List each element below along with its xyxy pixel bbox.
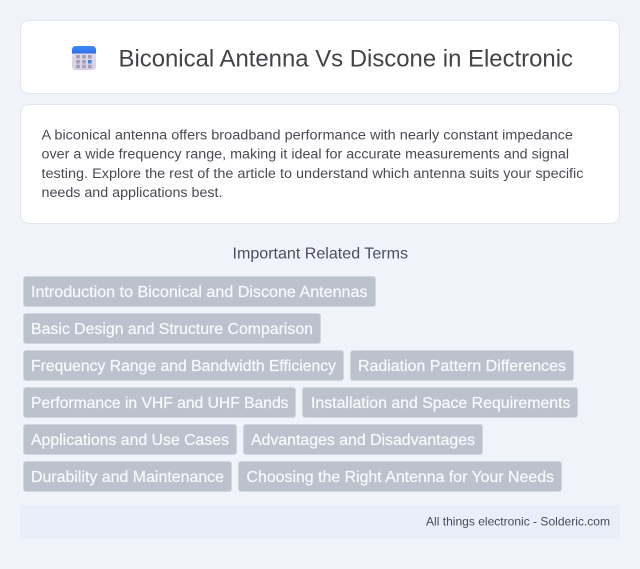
tag: frequency range: Frequency Range and Bandwidth Efficiency [31,358,336,375]
tag: advantages: Advantages and Disadvantages [251,432,475,449]
tag: VHF and UHF performance: Performance in VHF and UHF Bands [31,395,288,412]
tag: applications [24,424,236,454]
tag: advantages [244,424,482,454]
tag: frequency range [24,350,344,380]
tag: basic design [24,314,320,344]
tag: introduction [24,276,376,306]
tag: introduction: Introduction to Biconical and Discone Antennas [31,284,368,301]
heading: related terms: Important Related Terms [232,246,408,262]
tag: installation: Installation and Space Requirements [311,395,570,412]
tag: applications: Applications and Use Cases [31,432,229,449]
tag: durability [24,462,232,492]
tag: durability: Durability and Maintenance [31,469,224,486]
icon: calendar [72,46,96,70]
tag: choosing antenna: Choosing the Right Antenna for Your Needs [246,469,554,486]
intro paragraph: needs and applications best. [42,185,222,201]
tag: basic design: Basic Design and Structure Comparison [31,321,313,338]
tag: choosing antenna [238,462,562,492]
footer credit: All things electronic - Solderic.com [426,515,610,529]
intro paragraph: over a wide frequency range, making it ideal for accurate measurements and signal [42,147,569,163]
tag: installation [302,388,578,418]
panel: intro text [20,104,620,224]
tag: radiation pattern [350,350,574,380]
intro paragraph: testing. Explore the rest of the article to understand which antenna suits your specific [42,166,584,182]
tag: VHF and UHF performance [24,388,296,418]
intro paragraph: A biconical antenna offers broadband performance with nearly constant impedance [42,127,573,143]
intro paragraph [42,127,584,201]
tag list [24,276,578,492]
panel: title card [20,20,620,94]
title: Biconical Antenna Vs Discone in Electronic [118,46,573,72]
footer [20,505,620,539]
tag: radiation pattern: Radiation Pattern Differences [358,358,566,375]
